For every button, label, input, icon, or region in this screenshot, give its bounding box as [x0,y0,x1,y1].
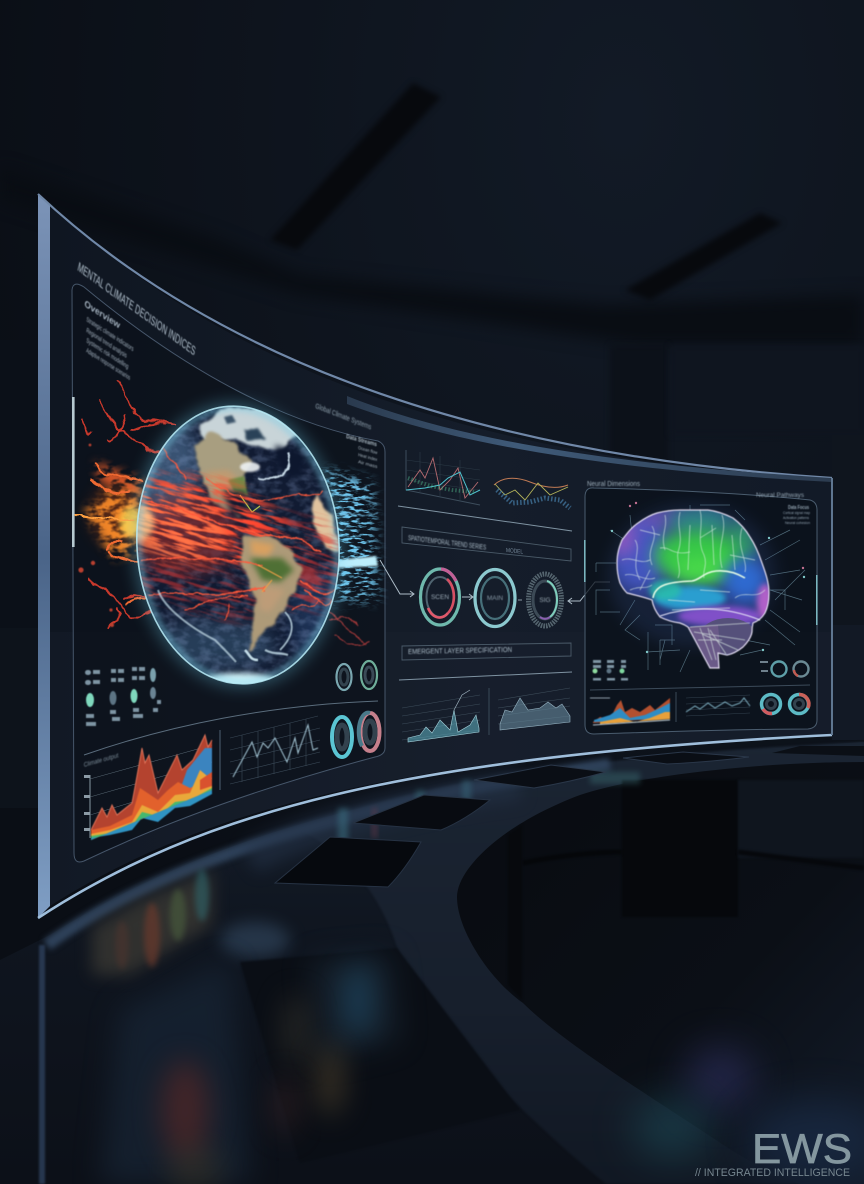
side note text: Data Streams [346,434,378,448]
area chart slate [489,688,570,735]
side note text: Ocean flow [358,445,378,455]
divider top [398,506,572,531]
small metric grid [85,667,161,726]
filaments over South America and ocean [138,445,335,620]
chart caption: Climate output [84,753,119,769]
divider bottom [399,672,572,680]
stacked area chart [84,735,212,840]
table front glow edge [47,764,610,945]
brain gyri [622,510,765,660]
central well [457,762,864,1184]
overview text block: Adaptive response scenarios [86,347,131,382]
screen left edge [38,194,50,918]
note text: Neural cohesion [785,520,810,525]
tablets on the table [240,746,864,1163]
panel: processing (centre) [380,450,610,742]
South America [240,536,303,652]
panel headings: Neural Dimensions [587,481,640,488]
curved display screen [38,194,840,922]
Gulf dark water [222,490,252,520]
back pillar [622,780,738,917]
note text: Cortical signal map [783,510,811,515]
ring 1 [420,569,460,625]
overview text block: Systemic risk modelling [86,337,129,371]
side note text: Heat index [358,452,378,462]
panel heading: MENTAL CLIMATE DECISION INDICES [76,259,197,359]
red weather mass [133,495,237,575]
colour area chart [590,698,670,725]
note text: Data Focus [788,505,809,511]
ring 1: SCEN [431,594,449,601]
small gauges [336,661,377,690]
brain outline [617,510,769,668]
gear ring: SIG [539,597,551,604]
arctic ice and clouds [198,408,300,450]
donut gauges [762,694,809,714]
overview text block: Overview [84,298,122,331]
label box 1: SPATIOTEMPORAL TREND SERIES [408,533,486,552]
label box 1 [402,527,571,561]
overview text block [84,298,134,382]
side note text: Air mass [358,459,378,469]
connector arrow from globe [380,560,414,597]
globe [124,394,352,696]
monochrome line chart [676,692,750,722]
dense line chart [494,478,570,508]
panel left accent bar [72,397,75,547]
donut gauges [332,713,380,757]
small metrics [592,660,628,680]
arrow ring 2 to gear [518,599,522,601]
brain temporal lobe outline [653,571,745,598]
screen right edge [831,478,833,735]
side note text [346,434,378,469]
overview text block: Strategic climate indicators [86,316,134,354]
blue particle streams right of globe [325,470,378,600]
table ring band [300,742,864,1184]
red and orange tendrils left of globe [76,380,175,627]
divider [590,685,810,690]
panel: neural (right): Neural Pathways [756,492,805,499]
panel outline [585,488,817,734]
side accent bars [584,540,586,582]
ring 2: MAIN [487,595,503,602]
ring 2 [475,570,515,626]
panel: climate (left) [72,259,385,862]
panel outline [72,284,385,862]
tagline: // INTEGRATED INTELLIGENCE [695,1167,850,1179]
multi-colour line chart [406,450,480,505]
Greenland dark sea [275,445,305,480]
logo: EWS: EWS [752,1125,852,1172]
gear ring [528,574,562,626]
label box 1: MODEL [506,548,524,556]
red lines lower right of globe [326,608,370,645]
label box 2: EMERGENT LAYER SPECIFICATION [408,645,512,656]
note text: Activation patterns [783,515,809,520]
table reflections of the screen [39,772,640,1184]
lower clouds [158,590,292,662]
North America [194,432,252,520]
logo: EWS [695,1125,852,1179]
line chart [220,716,320,790]
label box 2 [402,643,571,660]
table and floor [0,742,864,1184]
divider [84,701,378,755]
neural connector lines [596,505,805,672]
note text [783,505,811,525]
white cloud [240,462,260,472]
screen top rim [38,194,832,478]
screen bottom rim [38,735,832,918]
area chart mono [402,690,480,742]
panel sub-heading right: Global Climate Systems [315,403,372,432]
connector arrow from brain [568,582,610,604]
brain [608,500,780,675]
small gauges [760,661,808,676]
arrow ring 1 to ring 2 [462,594,473,600]
Africa limb [312,492,340,552]
panel: neural (right) [584,481,818,734]
overview text block: Regional trend analysis [86,327,128,360]
